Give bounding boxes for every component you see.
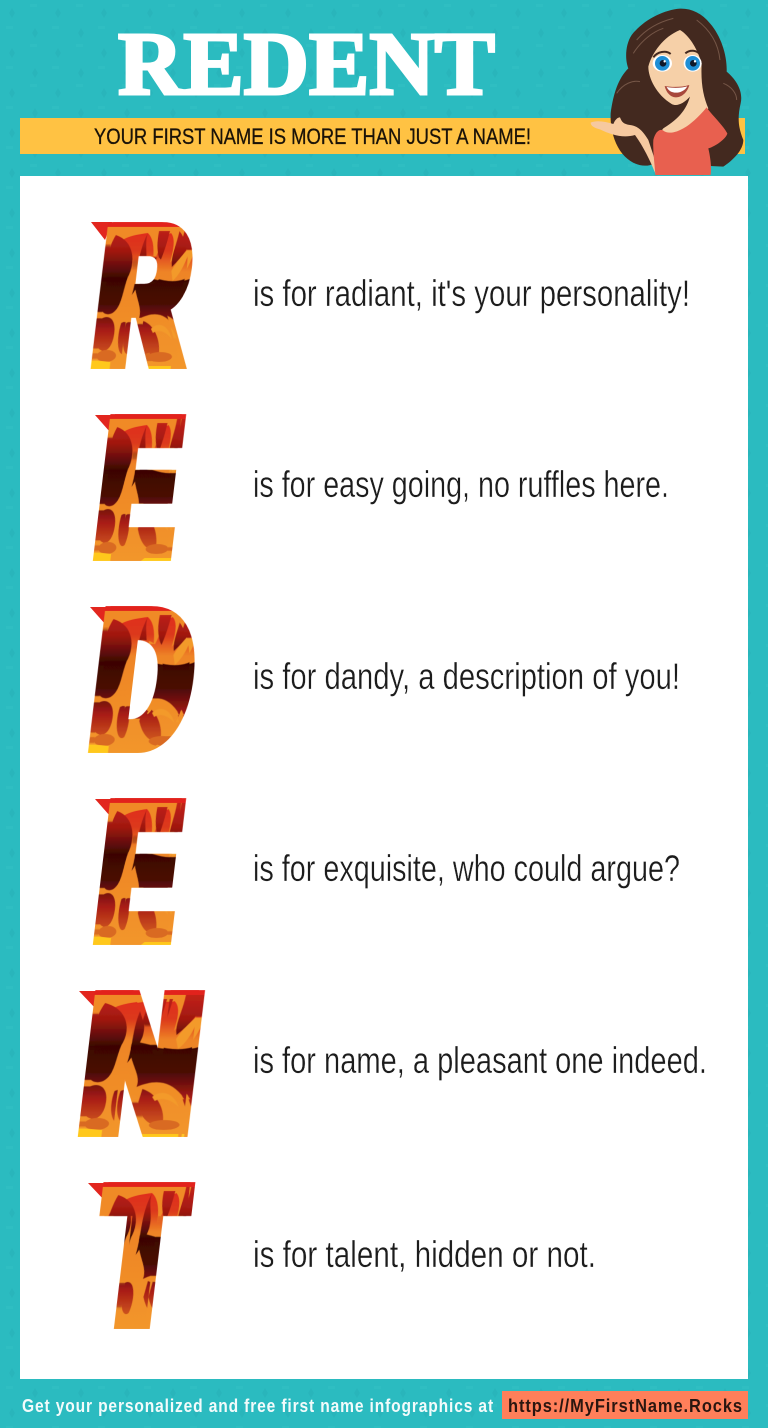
banner text: YOUR FIRST NAME IS MORE THAN JUST A NAME! (94, 124, 531, 149)
coral top (653, 107, 727, 175)
footer text: Get your personalized and free first name infographics at (22, 1396, 494, 1416)
letter E: E (89, 378, 189, 597)
letter E: E (89, 762, 189, 981)
smile (665, 85, 689, 97)
row D (84, 570, 680, 789)
arm and hand (591, 117, 660, 175)
eyes (653, 51, 702, 72)
text: talent: is for talent, hidden or not. (253, 1234, 596, 1275)
row N (74, 955, 707, 1173)
footer url badge (502, 1391, 748, 1419)
title: REDENT (118, 15, 495, 114)
character: cartoon woman (591, 9, 743, 175)
face and neck (648, 30, 708, 134)
row T (88, 1147, 596, 1366)
hair (611, 9, 743, 167)
banner (20, 118, 745, 154)
row R (87, 185, 690, 405)
row E2 (89, 762, 680, 981)
letter N: N (74, 955, 209, 1173)
footer url badge: https://MyFirstName.Rocks (508, 1396, 743, 1416)
panel: main white card (20, 176, 748, 1379)
letter T: T (89, 1147, 192, 1366)
letter R: R (87, 185, 200, 405)
letter D: D (84, 570, 203, 789)
row E (89, 378, 669, 597)
